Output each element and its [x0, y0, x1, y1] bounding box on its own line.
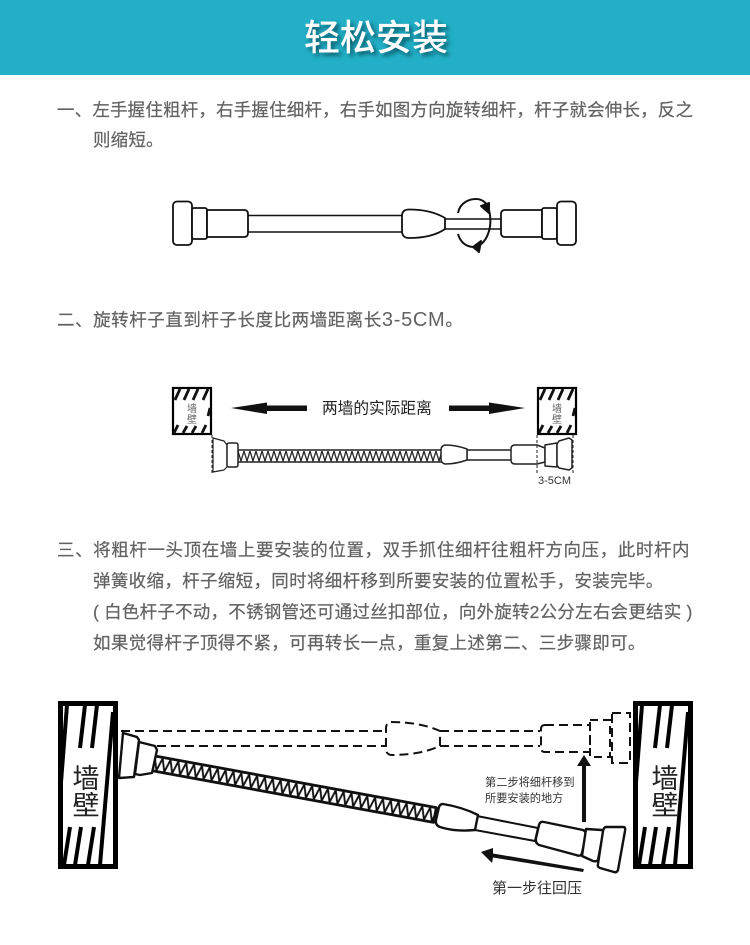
left wall: 壁 [72, 791, 100, 821]
step two caption [485, 775, 575, 805]
right end cap [557, 202, 576, 245]
step two caption: 所要安装的地方 [485, 791, 563, 805]
left cap [119, 733, 139, 778]
diagram 1: rod with rotation arrows [173, 199, 576, 252]
up arrow [577, 755, 591, 822]
left wall [60, 704, 116, 866]
right wall [635, 704, 690, 866]
left arrow [481, 848, 584, 872]
step three text: 弹簧收缩，杆子缩短，同时将细杆移到所要安装的位置松手，安装完毕。 [93, 571, 664, 591]
right wall: 壁 [552, 413, 562, 426]
left collar [192, 208, 207, 239]
right cap [557, 438, 572, 470]
step one caption: 第一步往回压 [492, 879, 582, 897]
step one text: 一、左手握住粗杆，右手握住细杆，右手如图方向旋转细杆，杆子就会伸长，反之 [57, 100, 693, 120]
grip [436, 804, 478, 831]
grip [441, 445, 467, 464]
step one text: 则缩短。 [93, 130, 164, 150]
step three text: 三、将粗杆一头顶在墙上要安装的位置，双手抓住细杆往粗杆方向压，此时杆内 [57, 540, 690, 560]
left collar [227, 443, 238, 467]
measure label: 3-5CM [538, 475, 571, 487]
step two text: 二、旋转杆子直到杆子长度比两墙距离长3-5CM。 [57, 309, 463, 331]
left end cap [173, 202, 192, 245]
right collar [542, 208, 557, 239]
left cap [213, 438, 227, 472]
spring rod [213, 438, 572, 472]
sleeve [511, 445, 545, 464]
left wall: 墙 [187, 402, 197, 415]
dashed extents [212, 435, 573, 473]
right collar [545, 443, 557, 467]
grip [402, 210, 445, 238]
tilted spring rod [119, 733, 625, 872]
diagram 2: wall distance [173, 388, 576, 487]
step one text [57, 100, 693, 150]
arrow right [449, 402, 525, 414]
right wall: 壁 [652, 791, 678, 821]
right wall: 墙 [652, 764, 678, 794]
left wall: 墙 [72, 764, 100, 794]
step three text [57, 540, 693, 653]
spring [152, 756, 436, 822]
step three text: 如果觉得杆子顶得不紧，可再转长一点，重复上述第二、三步骤即可。 [93, 633, 646, 653]
collar [582, 829, 603, 861]
left sleeve [207, 210, 248, 237]
left wall: 壁 [187, 413, 197, 426]
distance label: 两墙的实际距离 [322, 400, 432, 418]
diagram 3: install with walls [60, 704, 690, 897]
thin tube [467, 450, 512, 460]
end cap [598, 827, 625, 872]
left collar [135, 742, 157, 775]
thin tube [444, 219, 502, 229]
right wall: 墙 [552, 402, 562, 415]
left wall [173, 388, 211, 434]
title: 轻松安装 [304, 17, 448, 58]
arrow left [231, 402, 307, 414]
header band [0, 0, 750, 75]
thick tube [247, 216, 403, 232]
sleeve [536, 822, 586, 856]
step three text: ( 白色杆子不动，不锈钢管还可通过丝扣部位，向外旋转2公分左右会更结实 ) [93, 602, 693, 622]
right sleeve [501, 210, 542, 237]
dashed ghost rod [121, 713, 630, 763]
right wall [538, 388, 576, 434]
thin tube [475, 816, 538, 841]
rotation arrows [458, 199, 490, 252]
step two caption: 第二步将细杆移到 [485, 775, 575, 789]
spring [238, 450, 442, 462]
